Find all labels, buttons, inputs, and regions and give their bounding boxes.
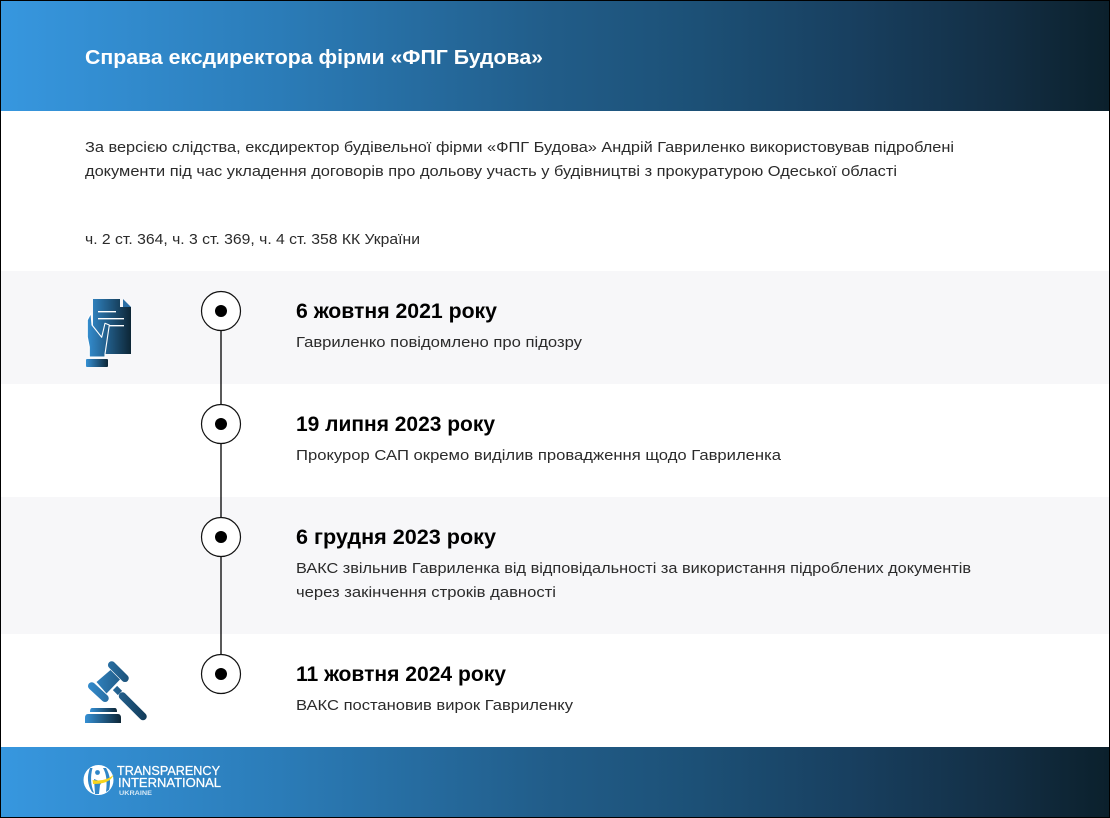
icon: gavel <box>85 665 143 723</box>
event 2: 19 липня 2023 року <box>296 413 495 436</box>
event 4: 11 жовтня 2024 року <box>296 663 506 686</box>
event 3: 6 грудня 2023 року <box>296 526 496 549</box>
event 1 <box>296 300 583 351</box>
footer band <box>1 747 1109 817</box>
title: Справа ексдиректора фірми «ФПГ Будова» <box>85 46 543 69</box>
intro text block: За версією слідства, ексдиректор будівельної фірми «ФПГ Будова» Андрій Гавриленко використовував підроблені <box>85 139 954 156</box>
logo wordmark: INTERNATIONAL <box>118 776 221 790</box>
event 3: через закінчення строків давності <box>296 584 556 601</box>
intro text block: документи під час укладення договорів про дольову участь у будівництві з прокуратурою Одеської області <box>85 163 897 180</box>
event 2 <box>296 413 782 464</box>
event 4 <box>296 663 574 714</box>
event 1: Гавриленко повідомлено про підозру <box>296 334 583 351</box>
legal articles: ч. 2 ст. 364, ч. 3 ст. 369, ч. 4 ст. 358 КК України <box>85 231 420 248</box>
timeline marker 3 <box>202 518 240 556</box>
header band <box>1 1 1109 111</box>
timeline marker 4 <box>202 654 240 694</box>
icon: hand holding document <box>86 299 131 367</box>
event 1: 6 жовтня 2021 року <box>296 300 497 323</box>
logo emblem <box>84 765 114 795</box>
logo: Transparency International Ukraine <box>84 764 221 797</box>
logo wordmark <box>117 764 221 797</box>
logo wordmark: UKRAINE <box>119 790 153 797</box>
timeline marker 1 <box>202 292 240 330</box>
event 3 <box>296 526 971 601</box>
timeline marker 2 <box>202 404 240 444</box>
panel: event 3 background <box>1 497 1109 634</box>
logo wordmark: TRANSPARENCY <box>117 764 221 778</box>
event 4: ВАКС постановив вирок Гавриленку <box>296 697 574 714</box>
timeline <box>202 292 240 694</box>
panel: event 1 background <box>1 271 1109 384</box>
event 2: Прокурор САП окремо виділив провадження щодо Гавриленка <box>296 447 782 464</box>
intro text block <box>85 139 954 180</box>
event 3: ВАКС звільнив Гавриленка від відповідальності за використання підроблених документів <box>296 560 971 577</box>
